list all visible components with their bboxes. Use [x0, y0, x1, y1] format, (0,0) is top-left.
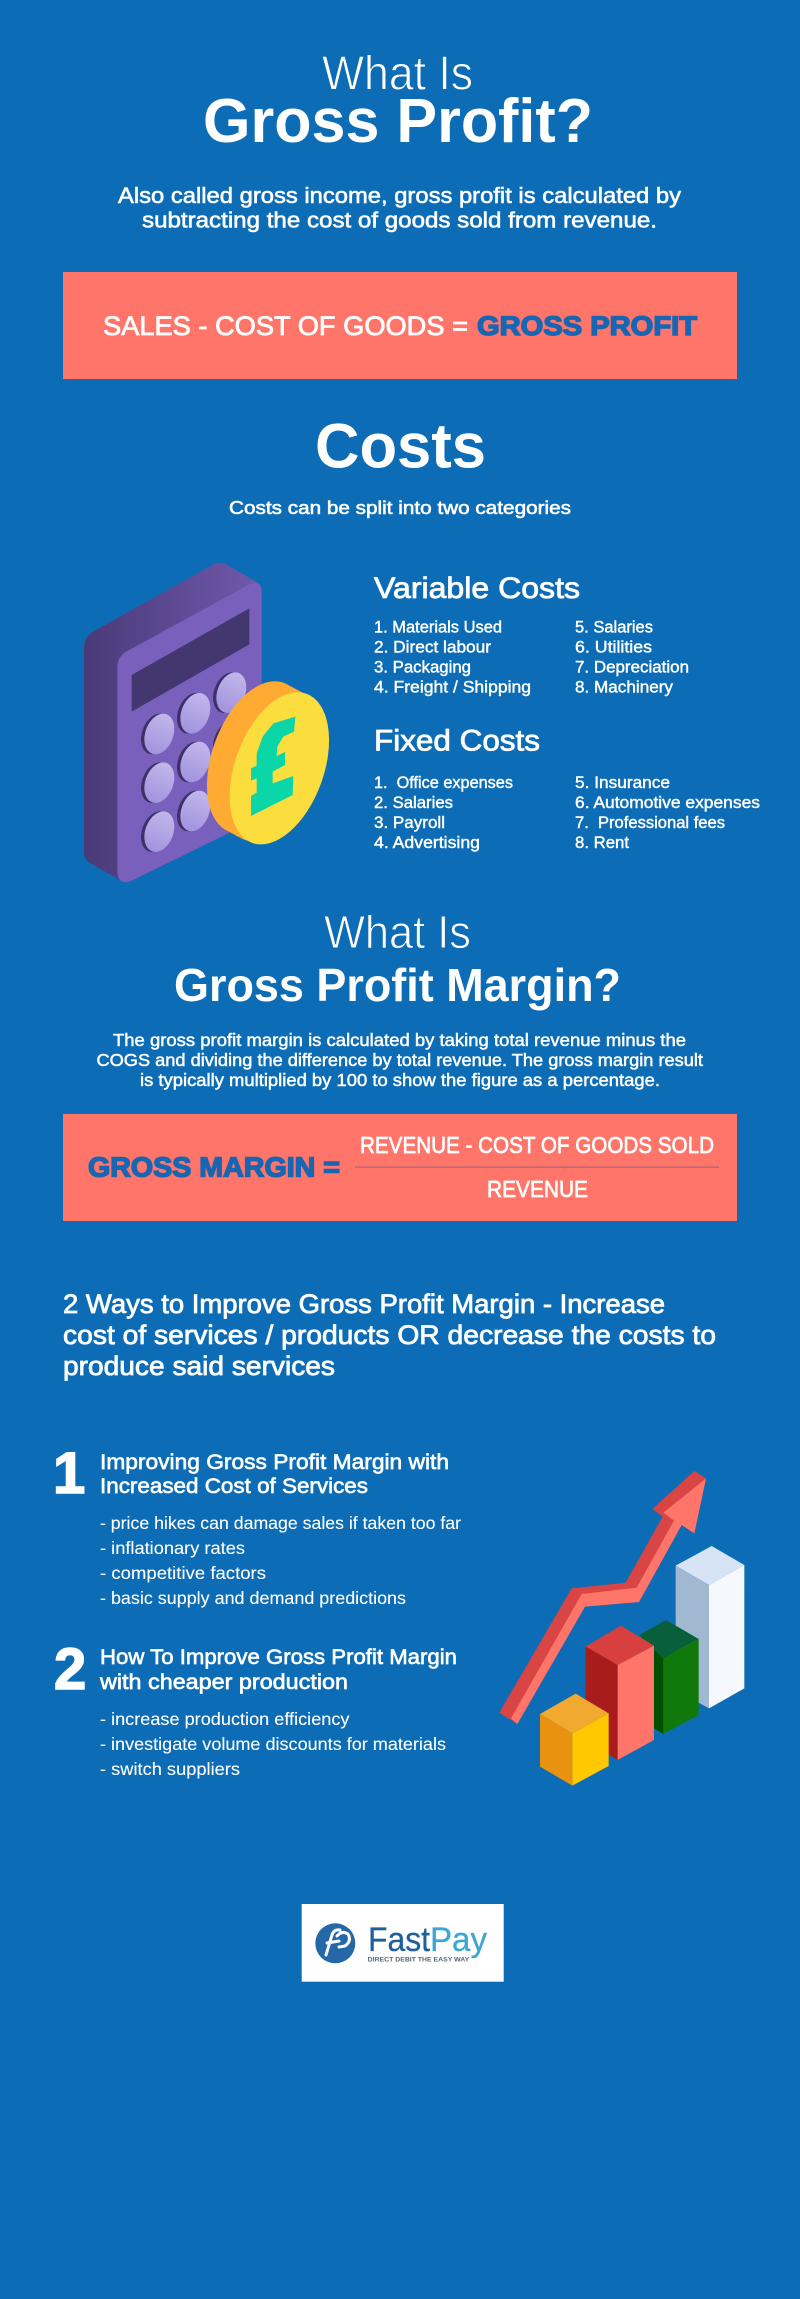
list: variable costs column 2: 7. Depreciation	[575, 658, 689, 677]
list: fixed costs column 1: 1. Office expenses	[374, 773, 513, 792]
heading: way 2: How To Improve Gross Profit Margin	[100, 1645, 457, 1669]
list: way 1 points: - inflationary rates	[100, 1538, 245, 1558]
panel: gross profit formula: GROSS PROFIT	[477, 311, 698, 341]
list: variable costs column 1: 3. Packaging	[374, 658, 471, 677]
red bar	[586, 1626, 654, 1760]
list: fixed costs column 2	[575, 773, 760, 852]
list: variable costs column 1: 2. Direct labour	[374, 638, 491, 657]
panel: variable costs	[374, 572, 689, 697]
heading: way 1: Increased Cost of Services	[100, 1474, 368, 1498]
logo: FastPay	[302, 1904, 504, 1982]
list: fixed costs column 2: 5. Insurance	[575, 773, 670, 792]
list: way 2 points: - switch suppliers	[100, 1759, 240, 1779]
list: variable costs column 2: 8. Machinery	[575, 678, 673, 697]
logo wordmark: DIRECT DEBIT THE EASY WAY	[368, 1957, 470, 1964]
chart icon: rising bars and arrow	[499, 1471, 744, 1786]
panel: gross margin formula: REVENUE - COST OF GOODS SOLD	[360, 1132, 714, 1158]
number 1: 1	[53, 1441, 85, 1506]
intro text: subtracting the cost of goods sold from revenue.	[142, 208, 657, 232]
panel: gross margin formula	[63, 1114, 737, 1221]
list: fixed costs column 2: 7. Professional fees	[575, 813, 725, 832]
list: way 1 points: - basic supply and demand predictions	[100, 1588, 406, 1608]
number 2: 2	[54, 1637, 86, 1702]
margin explanation text: is typically multiplied by 100 to show the figure as a percentage.	[140, 1070, 660, 1090]
icon: calculator with pound coin	[84, 563, 348, 882]
list: way 1 points: - competitive factors	[100, 1563, 266, 1583]
heading: gross profit margin: Gross Profit Margin?	[174, 959, 621, 1011]
heading: gross profit margin	[174, 906, 621, 1011]
list: way 2 points: - investigate volume discounts for materials	[100, 1734, 446, 1754]
margin explanation text: The gross profit margin is calculated by taking total revenue minus the	[113, 1030, 686, 1050]
logo wordmark: Fast	[368, 1921, 431, 1959]
list: way 2 points: - increase production efficiency	[100, 1709, 350, 1729]
heading: way 2: with cheaper production	[99, 1670, 348, 1694]
list: fixed costs column 2: 8. Rent	[575, 833, 629, 852]
arrow	[499, 1471, 706, 1724]
heading: 2 ways to improve: cost of services / products OR decrease the costs to	[63, 1320, 716, 1350]
panel: way 1	[53, 1441, 461, 1608]
list: variable costs column 2: 5. Salaries	[575, 618, 653, 637]
list: fixed costs column 1	[374, 773, 513, 852]
heading: 2 ways to improve	[63, 1289, 716, 1381]
list: way 2 points	[100, 1709, 446, 1779]
green bar	[639, 1620, 699, 1734]
heading: way 2	[99, 1645, 457, 1694]
list: fixed costs column 1: 2. Salaries	[374, 793, 453, 812]
list: variable costs column 1: 1. Materials Used	[374, 618, 502, 637]
white bar	[676, 1546, 744, 1708]
title	[203, 48, 593, 156]
list: variable costs column 1: 4. Freight / Shipping	[374, 678, 531, 697]
yellow bar	[540, 1694, 609, 1786]
list: fixed costs column 1: 4. Advertising	[374, 833, 480, 852]
heading: costs	[229, 412, 571, 518]
margin explanation text: COGS and dividing the difference by total revenue. The gross margin result	[96, 1050, 703, 1070]
logo wordmark	[368, 1921, 487, 1964]
list: variable costs column 1	[374, 618, 531, 697]
intro text: Also called gross income, gross profit is calculated by	[118, 183, 681, 208]
list: way 1 points: - price hikes can damage sales if taken too far	[100, 1513, 461, 1533]
heading: costs: Costs	[315, 412, 486, 482]
list: variable costs column 2: 6. Utilities	[575, 638, 652, 657]
heading: gross profit margin: What Is	[324, 906, 471, 958]
heading: way 1: Improving Gross Profit Margin with	[100, 1450, 449, 1474]
heading: way 1	[100, 1450, 449, 1498]
list: fixed costs column 2: 6. Automotive expenses	[575, 793, 760, 812]
heading: 2 ways to improve: 2 Ways to Improve Gross Profit Margin - Increase	[63, 1289, 665, 1319]
panel: way 2	[54, 1637, 457, 1779]
panel: gross profit formula: SALES - COST OF GOODS =	[103, 311, 468, 341]
icon: FastPay mark	[315, 1923, 355, 1963]
panel: gross margin formula: REVENUE	[487, 1176, 588, 1202]
title: What Is	[322, 48, 473, 100]
list: variable costs column 2	[575, 618, 689, 697]
logo wordmark: Pay	[430, 1921, 487, 1959]
list: way 1 points	[100, 1513, 461, 1608]
panel: gross margin formula: GROSS MARGIN =	[88, 1152, 340, 1183]
heading: fixed costs: Fixed Costs	[374, 725, 540, 758]
intro text	[118, 183, 681, 232]
panel: fixed costs	[374, 725, 760, 852]
heading: 2 ways to improve: produce said services	[63, 1351, 335, 1381]
heading: costs: Costs can be split into two categories	[229, 497, 571, 518]
title: Gross Profit?	[203, 87, 593, 156]
margin explanation text	[96, 1030, 703, 1090]
heading: variable costs: Variable Costs	[374, 572, 580, 605]
list: fixed costs column 1: 3. Payroll	[374, 813, 445, 832]
panel: gross profit formula	[63, 272, 737, 379]
